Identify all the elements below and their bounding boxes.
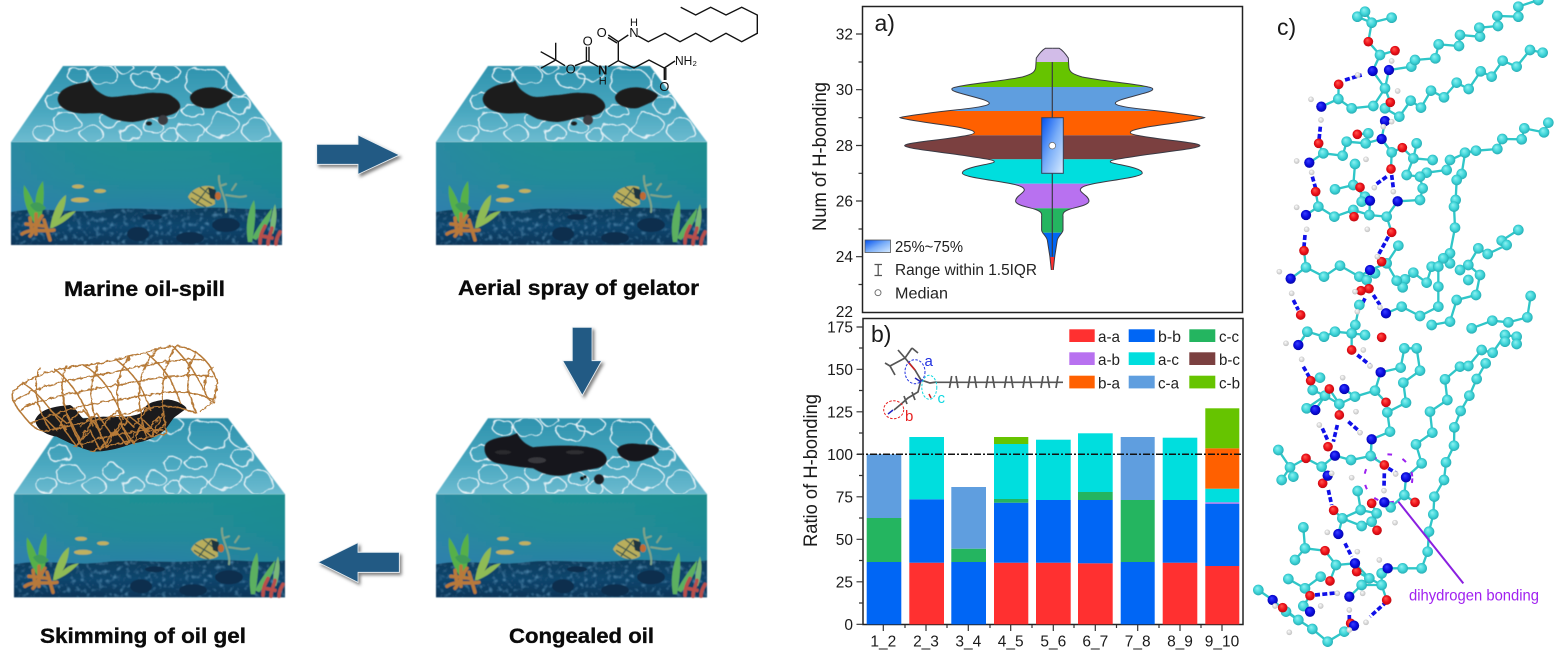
bars — [867, 408, 1239, 624]
x tick labels — [870, 634, 1240, 651]
caption: marine oil-spill: Marine oil-spill — [64, 278, 225, 301]
100 percent reference line — [857, 453, 1243, 455]
x tick labels: 8_9 — [1167, 634, 1193, 651]
arrow: to skimming — [318, 543, 399, 582]
oil slick — [58, 80, 233, 126]
axis ticks b — [856, 327, 1222, 631]
x tick labels: 3_4 — [955, 634, 982, 651]
fishing net — [12, 346, 217, 452]
y axis ticks a — [856, 34, 862, 284]
legend b: c-b — [1219, 376, 1240, 392]
y tick labels b: 25 — [836, 574, 853, 591]
frame b — [863, 318, 1243, 624]
legend b: b-c — [1219, 352, 1240, 369]
chart b: stacked bar chart — [801, 318, 1243, 651]
y axis title b: Ratio of H-bonding — [801, 394, 822, 547]
legend b: a-b — [1098, 352, 1120, 369]
site b marker — [884, 401, 904, 419]
gelator chemical structure: O — [659, 79, 669, 94]
legend b: b-b — [1158, 329, 1181, 346]
y tick labels b: 50 — [836, 532, 853, 549]
y tick labels a: 32 — [836, 26, 853, 44]
arrow: to congealed oil — [563, 327, 602, 395]
arrow: to aerial spray — [317, 135, 399, 174]
molecule inset: c — [938, 390, 946, 407]
y tick labels b — [827, 320, 853, 634]
y tick labels b: 175 — [827, 320, 853, 336]
caption: skimming: Skimming of oil gel — [40, 625, 246, 648]
y tick labels b: 75 — [836, 489, 853, 506]
legend a: 25%~75% — [895, 239, 963, 256]
x tick labels: 6_7 — [1082, 634, 1108, 651]
box — [1042, 118, 1063, 173]
y tick labels b: 125 — [827, 404, 853, 421]
y tick labels b: 0 — [844, 617, 853, 634]
median marker — [1049, 142, 1056, 149]
y tick labels a: 24 — [836, 249, 853, 266]
caption: aerial spray: Aerial spray of gelator — [458, 277, 699, 300]
dihydrogen bonding label: dihydrogen bonding — [1409, 588, 1539, 604]
x tick labels: 4_5 — [998, 634, 1024, 651]
legend b: a-c — [1158, 352, 1179, 369]
dihydrogen bond pointer — [1398, 502, 1463, 583]
site a marker — [905, 360, 925, 384]
legend a: Range within 1.5IQR — [895, 262, 1037, 279]
gelator chemical structure: H — [599, 76, 607, 88]
step panel: skimming of oil gel — [12, 346, 285, 648]
caption: congealed oil: Congealed oil — [509, 625, 654, 648]
legend b — [1069, 329, 1240, 392]
chart a: violin plot — [810, 6, 1242, 321]
step panel: marine oil-spill — [11, 62, 282, 301]
step panel: congealed oil — [436, 414, 707, 648]
frame — [862, 6, 1242, 312]
gelator chemical structure: H — [630, 17, 638, 29]
gelator chemical structure: NH₂ — [675, 54, 697, 68]
x tick labels: 7_8 — [1125, 634, 1151, 651]
panel letter a: a) — [874, 10, 895, 36]
gelator chemical structure: N — [629, 25, 639, 40]
legend b: b-a — [1098, 376, 1120, 392]
gelator chemical structure: O — [597, 25, 607, 40]
molecule inset — [884, 348, 1063, 425]
legend a: Median — [895, 286, 948, 302]
step panel: aerial spray of gelator — [436, 7, 757, 300]
x tick labels: 5_6 — [1040, 634, 1066, 651]
legend a — [865, 239, 1037, 302]
oil gel in net — [12, 346, 217, 452]
molecule inset: b — [905, 408, 913, 425]
y tick labels a — [836, 26, 853, 321]
panel letter c: c) — [1277, 14, 1296, 40]
y tick labels b: 150 — [827, 362, 853, 379]
panel c: molecular assembly — [1253, 0, 1554, 647]
legend b: c-a — [1158, 376, 1179, 392]
legend b: a-a — [1098, 329, 1120, 346]
lower molecules — [1253, 326, 1522, 647]
x tick labels: 9_10 — [1205, 634, 1240, 651]
whisker — [1051, 62, 1053, 257]
molecule inset: a — [924, 353, 934, 370]
panel letter b: b) — [871, 321, 891, 347]
violin outline — [900, 48, 1205, 270]
gelator chemical structure — [541, 7, 757, 94]
gelator chemical structure: O — [566, 62, 576, 76]
y tick labels a: 30 — [836, 82, 853, 99]
x tick labels: 1_2 — [870, 634, 896, 651]
gelator chemical structure: O — [583, 34, 593, 48]
upper molecules — [1276, 0, 1554, 334]
dihydrogen bond highlight circle — [1364, 454, 1412, 502]
violin bands — [890, 48, 1215, 271]
y tick labels a: 26 — [836, 193, 853, 210]
y tick labels a: 28 — [836, 138, 853, 155]
y axis title a: Num of H-bonding — [810, 82, 831, 231]
legend b: c-c — [1219, 329, 1239, 346]
y tick labels b: 100 — [827, 447, 853, 464]
y tick labels a: 22 — [836, 304, 853, 321]
gelator chemical structure: N — [598, 62, 607, 78]
site c marker — [922, 375, 937, 399]
x tick labels: 2_3 — [913, 634, 939, 651]
